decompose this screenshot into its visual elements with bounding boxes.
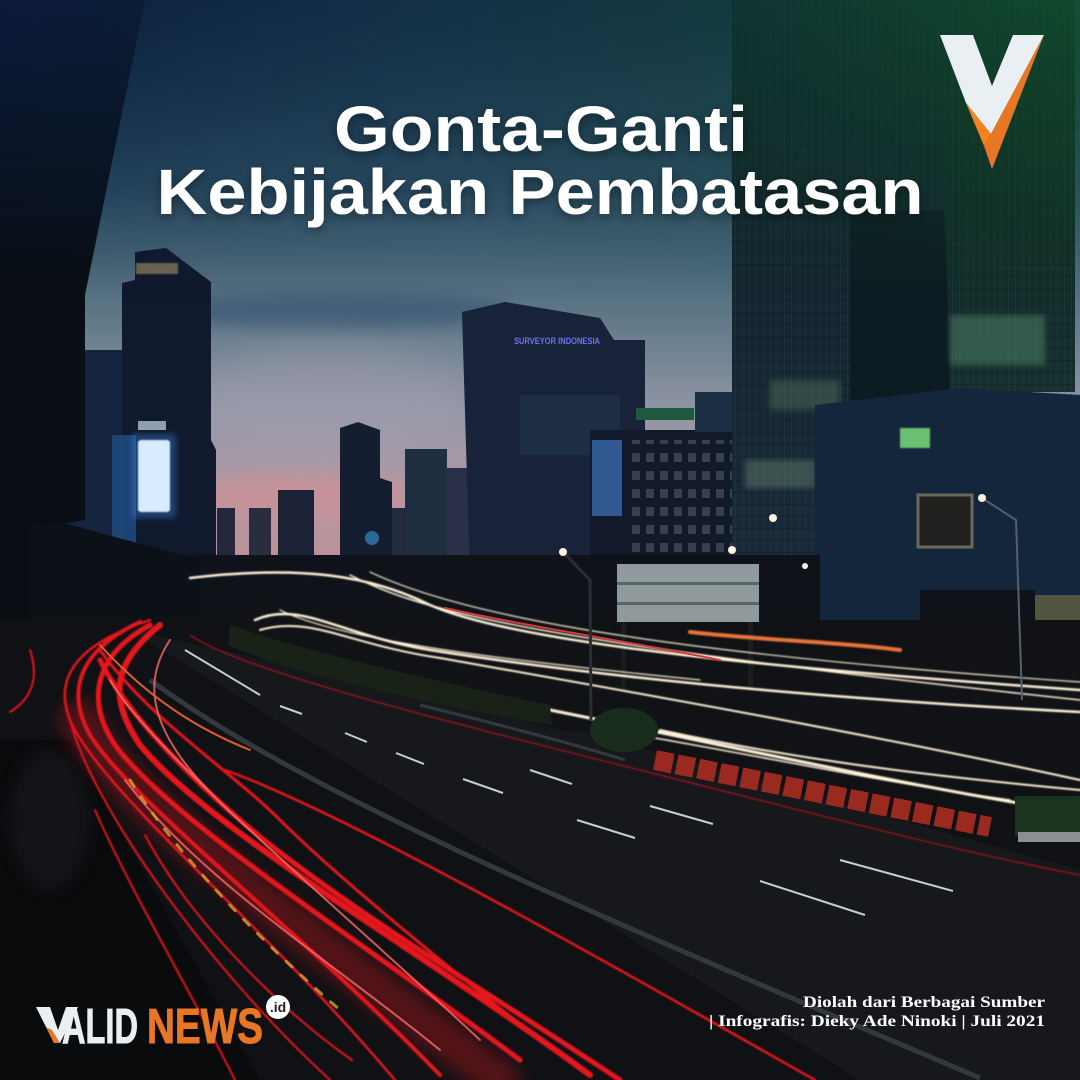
lane markings (185, 650, 953, 915)
skyline: low blue glass building right (815, 388, 1080, 660)
logo: Validnews.id: ALID (62, 1000, 138, 1054)
logo: Validnews.id: .id (270, 999, 286, 1015)
source credit: | Infografis: Dieky Ade Ninoki | Juli 2021 (709, 1013, 1045, 1030)
skyline: large glass tower right (732, 0, 1075, 600)
title: Gonta-Ganti (334, 93, 748, 165)
logo: Validnews.id (36, 995, 290, 1054)
title (156, 93, 924, 228)
source credit (709, 994, 1045, 1030)
street lamps (559, 494, 1022, 720)
top gradient overlay (0, 0, 1080, 300)
horizon treeline (180, 555, 820, 625)
left dark flyover pillar (0, 0, 200, 720)
roadside billboard (617, 564, 759, 692)
source credit: Diolah dari Berbagai Sumber (803, 994, 1045, 1011)
red light trails near lanes (10, 620, 1080, 1080)
logo: V mark (940, 35, 1044, 169)
skyline: office block with windows (590, 392, 745, 580)
background: dusk sky (0, 0, 1080, 620)
hedge median and orange road barriers (228, 625, 1080, 842)
skyline: left tower with billboard (60, 248, 216, 560)
skyline: distant mid buildings (217, 422, 471, 570)
road surface (0, 600, 1080, 1080)
skyline: Surveyor Indonesia tower: SURVEYOR INDONESIA (514, 336, 600, 346)
skyline: Surveyor Indonesia tower (462, 302, 645, 580)
guard rail (150, 680, 980, 1078)
white light trails far lanes (190, 572, 1080, 805)
logo: Validnews.id: NEWS (147, 1000, 263, 1054)
title: Kebijakan Pembatasan (156, 156, 924, 228)
